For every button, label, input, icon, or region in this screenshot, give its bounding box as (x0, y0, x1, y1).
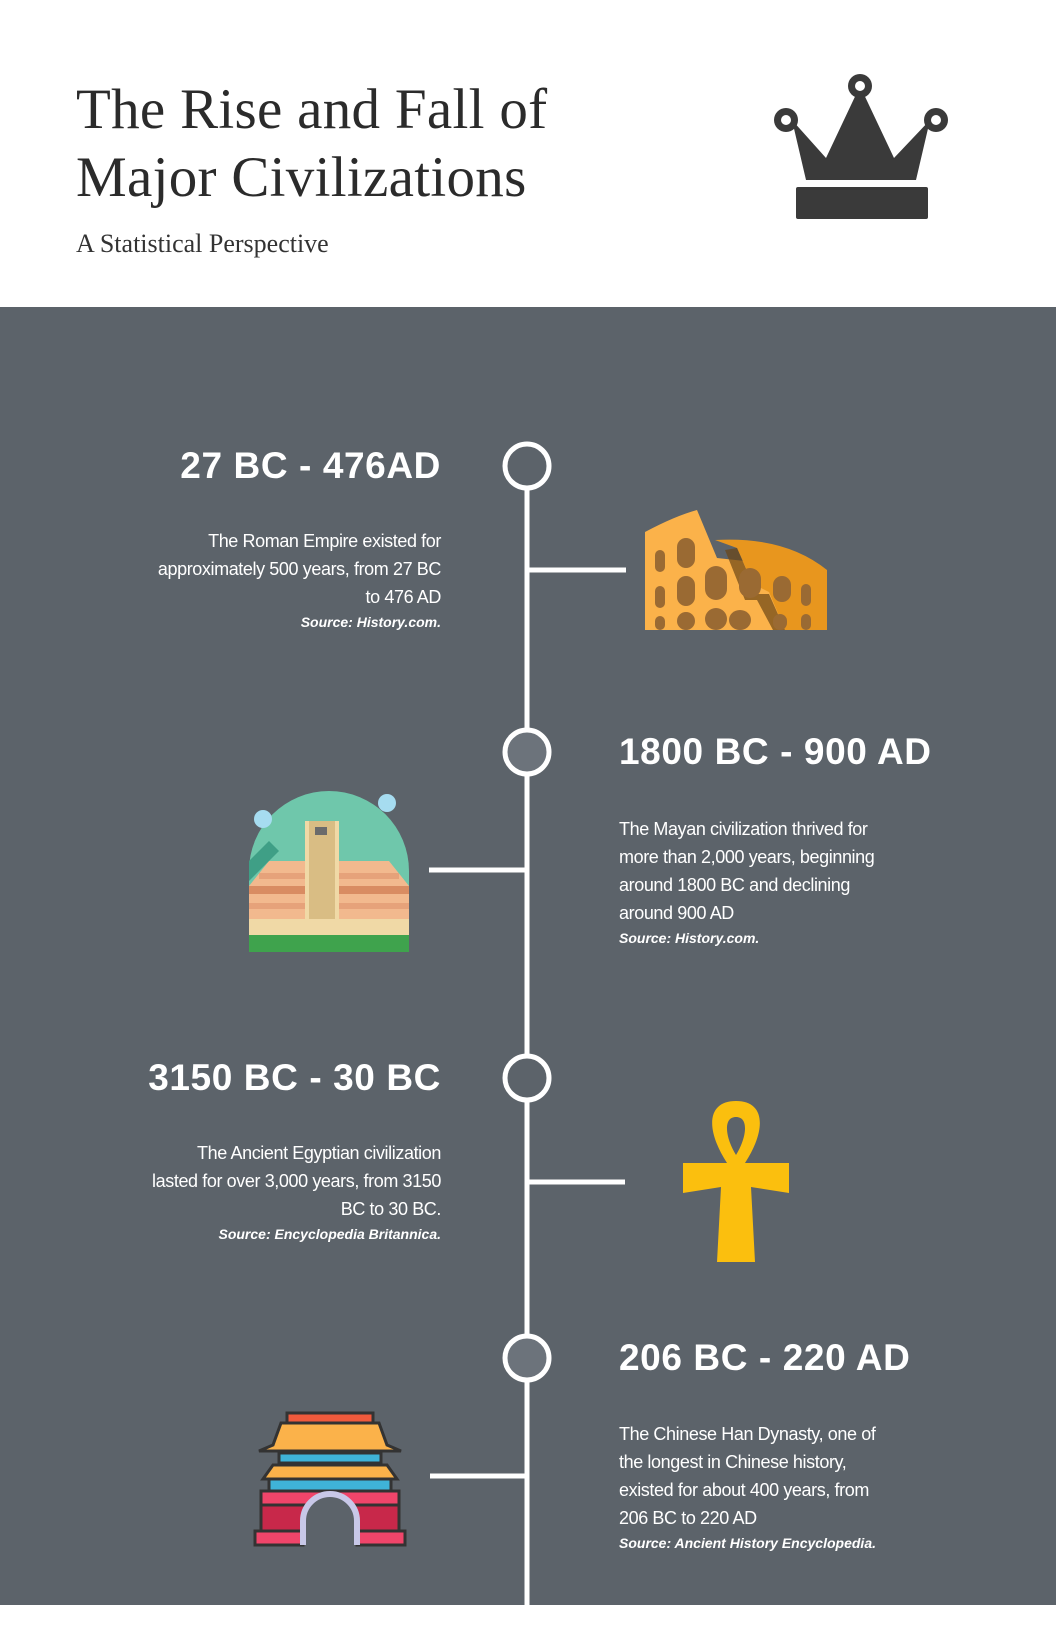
title: Major Civilizations (76, 146, 527, 209)
text: Egypt: Source: Encyclopedia Britannica. (218, 1226, 441, 1242)
text: Maya: more than 2,000 years, beginning (619, 847, 874, 867)
icon: ankh (683, 1101, 789, 1262)
text: Maya: around 900 AD (619, 903, 734, 923)
text: Maya (619, 819, 874, 946)
text: Han: existed for about 400 years, from (619, 1480, 869, 1500)
text: Han: 206 BC to 220 AD (619, 1508, 757, 1528)
title: The Rise and Fall of (76, 78, 547, 141)
text: Han: Source: Ancient History Encyclopedia. (619, 1535, 876, 1551)
heading: Roman: 27 BC - 476AD (180, 445, 441, 486)
icon: colosseum (645, 510, 827, 630)
title (76, 78, 548, 209)
text: Maya: Source: History.com. (619, 930, 759, 946)
text: Roman (158, 531, 442, 630)
text: Han: the longest in Chinese history, (619, 1452, 846, 1472)
text: Egypt (152, 1143, 441, 1242)
text: Maya: The Mayan civilization thrived for (619, 819, 868, 839)
text: Roman: to 476 AD (366, 587, 441, 607)
text: Han (619, 1424, 876, 1551)
text: Egypt: The Ancient Egyptian civilization (197, 1143, 441, 1163)
heading: Maya: 1800 BC - 900 AD (619, 731, 932, 772)
text: Maya: around 1800 BC and declining (619, 875, 850, 895)
text: Roman: Source: History.com. (301, 614, 441, 630)
icon: pyramid (249, 791, 409, 952)
text: Roman: approximately 500 years, from 27 BC (158, 559, 441, 579)
text: Egypt: lasted for over 3,000 years, from 3150 (152, 1171, 441, 1191)
icon: chinese gate (254, 1412, 406, 1546)
text: Egypt: BC to 30 BC. (341, 1199, 441, 1219)
heading: Han: 206 BC - 220 AD (619, 1337, 910, 1378)
text: Roman: The Roman Empire existed for (208, 531, 441, 551)
icon: crown (774, 74, 948, 219)
subtitle: A Statistical Perspective (76, 229, 329, 258)
text: Han: The Chinese Han Dynasty, one of (619, 1424, 875, 1444)
panel: timeline background (0, 307, 1056, 1605)
heading: Egypt: 3150 BC - 30 BC (148, 1057, 441, 1098)
